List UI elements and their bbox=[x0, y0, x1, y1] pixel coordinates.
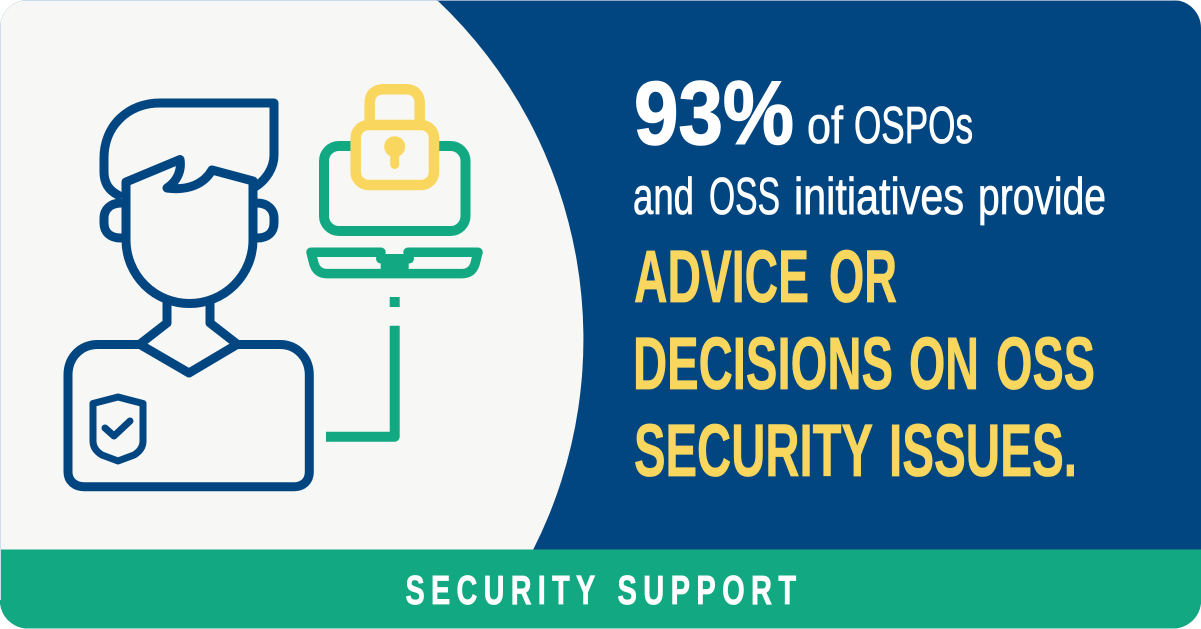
connector line bbox=[326, 297, 400, 437]
stat: 93%: 93% bbox=[634, 64, 794, 164]
text block: yellow highlight statement: SECURITY bbox=[634, 409, 873, 492]
text block: yellow highlight statement: ON bbox=[909, 322, 979, 405]
text block: statistic headline: provide bbox=[978, 168, 1106, 226]
padlock bbox=[356, 89, 434, 185]
text block: statistic headline: and bbox=[633, 168, 694, 226]
text block: statistic headline: of bbox=[807, 97, 843, 155]
footer label: SECURITY bbox=[406, 567, 602, 613]
torso bbox=[68, 344, 309, 487]
text block: yellow highlight statement: ISSUES. bbox=[889, 409, 1077, 492]
checkmark bbox=[105, 421, 130, 436]
text block: yellow highlight statement: OSS bbox=[996, 322, 1095, 405]
text block: yellow highlight statement: OR bbox=[829, 235, 897, 318]
left ear bbox=[104, 203, 121, 238]
text block: statistic headline: OSS bbox=[709, 168, 780, 226]
icon: laptop with padlock bbox=[311, 89, 478, 437]
laptop base bbox=[311, 252, 478, 278]
neck bbox=[140, 302, 237, 344]
icon: shield badge bbox=[93, 397, 143, 461]
right ear bbox=[257, 203, 274, 238]
hair bbox=[104, 103, 274, 195]
text block: yellow highlight statement: ADVICE bbox=[634, 235, 809, 318]
icon: person with shield bbox=[68, 103, 309, 487]
text block: statistic headline bbox=[633, 64, 1106, 226]
face bbox=[126, 160, 253, 304]
text block: statistic headline: initiatives bbox=[794, 168, 964, 226]
text block: statistic headline: OSPOs bbox=[854, 97, 973, 155]
laptop screen bbox=[324, 146, 466, 231]
text block: yellow highlight statement: DECISIONS bbox=[633, 322, 893, 405]
text block: yellow highlight statement bbox=[633, 235, 1095, 492]
footer label: SUPPORT bbox=[618, 567, 802, 613]
